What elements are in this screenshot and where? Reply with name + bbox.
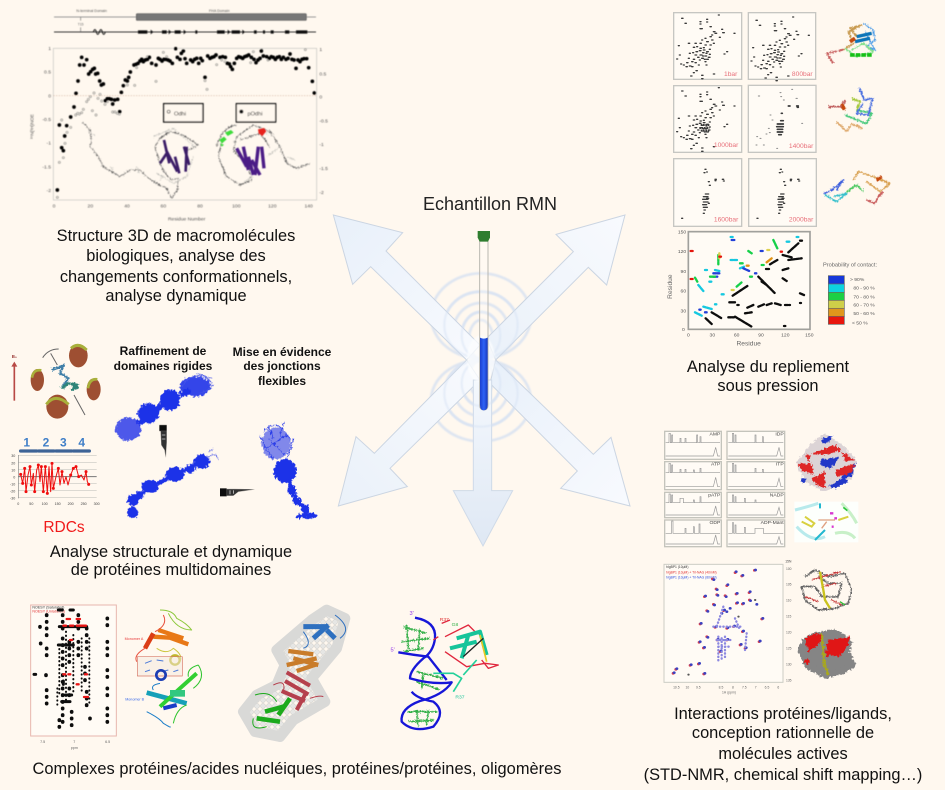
RDC domain labels: 3 [60, 436, 67, 450]
title: Echantillon RMN: Echantillon RMN [423, 194, 557, 214]
HSQC spectrum: 8 [732, 685, 734, 689]
axis labels: 30 [710, 333, 715, 339]
HSQC spectrum: 10 [685, 685, 689, 689]
magnetic field arrow: B₀ [12, 354, 17, 359]
legend: Odhi: Odhi [174, 112, 186, 118]
HSQC spectrum: 1H (ppm) [722, 690, 736, 694]
unfolded structure [823, 172, 890, 203]
red domain [282, 672, 310, 710]
right axis labels: 0.5 [319, 71, 326, 77]
caption: structure 3D: analyse dynamique [105, 287, 247, 305]
filled circles series [57, 49, 314, 190]
probability legend: 50 - 60 % [853, 311, 875, 317]
RDC chart: 10 [11, 468, 15, 472]
legend: pOdhi [236, 104, 276, 122]
HSQC spectrum: 7 [755, 685, 757, 689]
spectrum labels: ADP-Mant [761, 520, 784, 526]
HSQC spectrum: 10.5 [673, 685, 680, 689]
RDC chart: 150 [55, 502, 61, 506]
RDC chart: 30 [11, 454, 15, 458]
NOE chart: ¹⁵N{¹H}NOE [29, 114, 34, 139]
x axis labels: 40 [124, 203, 130, 209]
domain diagram [54, 9, 316, 34]
axis labels: 150 [678, 230, 686, 236]
RDC chart: 300 [94, 502, 100, 506]
domain diagram: N-terminal Domain [76, 9, 107, 13]
ring traces over arrows [444, 292, 518, 427]
caption: interactions: (STD-NMR, chemical shift mapping…) [644, 766, 922, 784]
NOESY spectrum: 6.5 [105, 740, 110, 744]
orange domain [287, 651, 318, 671]
HSQC spectrum: 7.5 [742, 685, 747, 689]
spectrum labels: ITP [776, 462, 784, 468]
spectrum 1600bar: 1600bar [714, 217, 739, 224]
ensemble: flexible [260, 423, 317, 519]
NOE chart: Residue Number [168, 216, 206, 222]
probability legend: < 50 % [852, 320, 868, 326]
RDC chart: -20 [10, 489, 15, 493]
RDC chart: 0 [17, 502, 19, 506]
x axis labels: 60 [161, 203, 166, 209]
spectrum labels: NADP [770, 493, 784, 499]
heading: raffinement: Raffinement de [120, 344, 206, 358]
HSQC spectrum: 15N [785, 559, 792, 563]
x axis labels [53, 203, 313, 209]
HSQC spectrum: hIgBP1 (10μM) + Trl-NAG (40mM) [666, 570, 717, 574]
probability legend [823, 262, 877, 326]
right axis labels: 1 [319, 47, 322, 53]
NOESY spectrum [31, 605, 116, 750]
domain bars [21, 446, 89, 456]
axis labels: 0 [687, 333, 690, 339]
NMR tube [478, 231, 490, 410]
long disordered chain [82, 122, 198, 198]
left axis labels: -2 [47, 188, 51, 194]
arrow: south-east [490, 360, 630, 506]
caption: multidomaines: Analyse structurale et dynamique [50, 543, 292, 561]
spectrum 1000bar [674, 86, 742, 152]
ligand-bound ribbon [802, 570, 852, 610]
green phospho residues [219, 130, 234, 147]
black contacts [706, 241, 804, 327]
RNA-protein complex [391, 611, 498, 729]
axis labels: 90 [758, 333, 764, 339]
HSQC spectrum: 130 [786, 662, 792, 666]
RDC domain labels: 2 [43, 436, 50, 450]
protein: Odhi [160, 140, 189, 173]
right axis labels: -1.5 [319, 166, 328, 172]
axis labels: 0 [682, 327, 685, 333]
central arrows and NMR tube [333, 215, 630, 546]
spectrum labels [708, 431, 784, 526]
NOE chart [29, 46, 328, 222]
contact map [667, 230, 877, 347]
NOESY spectrum: NOESY (Unlabeled) [32, 610, 65, 614]
domain diagram: T15 [78, 22, 84, 26]
spectrum 1bar: 1bar [724, 71, 738, 78]
contact map: Residue [736, 340, 761, 347]
panel: structure 3D [29, 9, 328, 222]
probability legend: 70 - 80 % [853, 294, 875, 300]
NOESY spectrum: ppm [71, 746, 78, 750]
HSQC spectrum: 100 [786, 567, 792, 571]
spectrum 1400bar: 1400bar [789, 143, 814, 150]
intermediate structure [828, 87, 873, 132]
protein: pOdhi [237, 147, 264, 175]
tube glass [480, 240, 488, 410]
RDC chart: 0 [13, 475, 15, 479]
x axis labels: 140 [304, 203, 313, 209]
domain diagram: FHA Domain [209, 9, 230, 13]
bicelles and protein [31, 344, 101, 419]
open circles series [57, 50, 305, 197]
electrostatic surface [797, 435, 856, 488]
HSQC spectrum: 9.5 [696, 685, 701, 689]
spectrum labels: IDP [775, 431, 784, 437]
axis labels: 150 [805, 333, 814, 339]
ribbon: protein monomers [125, 610, 202, 727]
left axis labels: -1 [47, 141, 51, 147]
oligomer SAXS envelope [243, 610, 346, 737]
panel: protéines multidomaines [10, 344, 317, 519]
RNA-protein complex: G8 [452, 622, 459, 628]
caption: interactions: molécules actives [718, 745, 848, 763]
caption: interactions: conception rationnelle de [692, 724, 874, 742]
left axis labels: 1 [48, 46, 51, 52]
spectrum traces [666, 433, 783, 544]
HSQC spectrum: hIgBP1 (10μM) [666, 565, 688, 569]
caption: structure 3D: changements conformationnels, [60, 268, 292, 286]
chain: pOdhi [217, 125, 310, 185]
spectrum 800bar: 800bar [792, 71, 813, 78]
spectrum labels: ATP [711, 462, 721, 468]
HSQC spectrum: hIgBP1 (10μM) + Trl-NAG (80mM) [666, 575, 717, 579]
spectrum 1600bar [674, 159, 742, 226]
arrow: north-west [333, 215, 480, 360]
HSQC spectrum: 8.5 [719, 685, 723, 689]
tube cap [478, 231, 490, 242]
RDC chart: 250 [81, 502, 87, 506]
axis labels: 120 [781, 333, 790, 339]
probability legend: 80 - 90 % [853, 286, 875, 292]
RDC domain labels: 4 [78, 436, 85, 450]
left axis labels: -0.5 [42, 117, 51, 123]
ensemble: rigid top [116, 373, 213, 440]
panel: repliement sous pression [674, 13, 890, 226]
right axis labels: 0 [319, 95, 322, 101]
axis labels: 60 [734, 333, 740, 339]
red residue [258, 128, 266, 136]
left axis labels: 0.5 [44, 70, 51, 76]
left axis labels [42, 46, 51, 194]
legend: pOdhi: pOdhi [247, 112, 263, 118]
STD spectra grid [665, 431, 785, 547]
caption: repliement: sous pression [717, 377, 819, 395]
probability legend: 60 - 70 % [853, 303, 875, 309]
spectrum labels: ODP [710, 520, 721, 526]
heading: jonctions: Mise en évidence [233, 345, 331, 359]
HSQC spectrum: 110 [786, 598, 791, 602]
axis labels: 90 [681, 269, 686, 275]
legend: Odhi [164, 104, 203, 122]
NOESY spectrum: 7 [73, 740, 75, 744]
axis labels: 30 [681, 308, 686, 314]
x axis labels: 20 [88, 203, 93, 209]
RNA-protein complex: 5' [391, 648, 395, 654]
arrow: north-east [487, 215, 625, 360]
colored contacts [691, 237, 798, 316]
RDC chart: 20 [11, 461, 15, 465]
right axis labels: -1 [319, 142, 324, 148]
axis labels: 120 [678, 249, 686, 255]
ligand binding site [794, 502, 858, 542]
panel: complexes [31, 605, 498, 750]
caption: multidomaines: de protéines multidomaines [71, 561, 271, 579]
ensemble: rigid bottom [127, 449, 218, 518]
heading: jonctions: des jonctions [243, 359, 321, 373]
right axis labels: -2 [319, 190, 324, 196]
RDC chart: 100 [42, 502, 48, 506]
heading: jonctions: flexibles [258, 374, 306, 388]
folded structure ribbon [827, 23, 875, 63]
left axis labels: 0 [48, 93, 51, 99]
probability legend: Probability of contact: [823, 262, 877, 268]
HSQC spectrum: 105 [786, 583, 792, 587]
blue domain [303, 625, 335, 638]
x axis labels: 80 [197, 203, 203, 209]
spectrum 800bar [748, 13, 816, 81]
HSQC spectrum: 135 [786, 678, 792, 682]
right axis labels: -0.5 [319, 118, 328, 124]
spectrum 2000bar [749, 159, 816, 226]
spectrum 1000bar: 1000bar [714, 142, 739, 149]
ribbon: protein monomers: Monomer B [125, 697, 145, 701]
spectrum labels: pATP [708, 493, 721, 499]
NOESY spectrum: 7.5 [40, 740, 45, 744]
RDC domain labels: 1 [23, 436, 30, 450]
radio-frequency rings [431, 273, 531, 441]
probability legend: > 90% [850, 277, 865, 283]
caption: complexes: Complexes protéines/acides nucléiques, protéines/protéines, oligomères [32, 760, 562, 778]
ribbon: protein monomers: Monomer A [125, 637, 144, 641]
caption: interactions: Interactions protéines/ligands, [674, 705, 892, 723]
panel: interactions protéines/ligands [664, 431, 858, 694]
right axis labels [319, 47, 328, 196]
spectrum 1400bar [748, 85, 816, 152]
RDC domain labels [23, 436, 85, 450]
RNA-protein complex: R37 [440, 617, 449, 623]
RNA-protein complex: R37 [455, 694, 465, 700]
sample liquid [480, 338, 488, 410]
spectrum 2000bar: 2000bar [789, 217, 814, 224]
HSQC spectrum [664, 559, 792, 694]
contact map: Residue [667, 274, 674, 299]
spectrum 1bar [674, 13, 742, 79]
green domain [257, 698, 290, 722]
axis labels [678, 230, 814, 339]
RDC chart: 200 [68, 502, 74, 506]
RDC chart: -30 [10, 496, 15, 500]
heading: raffinement: domaines rigides [114, 359, 213, 373]
arrow: south-west [338, 360, 480, 506]
RDC chart [10, 454, 100, 506]
HSQC spectrum: 6 [777, 685, 779, 689]
axis labels: 60 [681, 288, 686, 294]
pointer: right [220, 488, 255, 496]
x axis labels: 120 [268, 203, 277, 209]
RDC chart: -10 [10, 482, 15, 486]
left axis labels: -1.5 [42, 164, 51, 170]
caption: repliement: Analyse du repliement [687, 358, 849, 376]
RNA-protein complex: 3' [410, 611, 414, 617]
caption: structure 3D: biologiques, analyse des [86, 247, 266, 265]
HSQC spectrum: 125 [786, 646, 792, 650]
arrow: south [453, 380, 513, 546]
HSQC spectrum: 120 [786, 630, 792, 634]
RDC chart: 50 [29, 502, 33, 506]
label: RDCs: RDCs [43, 519, 85, 536]
caption: structure 3D: Structure 3D de macromolécules [57, 227, 295, 245]
x axis labels: 0 [53, 203, 56, 209]
grey surface with red patches [801, 633, 852, 675]
NOESY spectrum: NOESY (Saturated) [32, 606, 64, 610]
HSQC spectrum: 6.5 [765, 685, 769, 689]
central glow [467, 336, 495, 382]
plot frame [688, 232, 810, 329]
pointer: down [159, 425, 167, 458]
spectrum labels: AMP [710, 431, 721, 437]
HSQC spectrum: 115 [786, 614, 791, 618]
magnetic field arrow [11, 354, 17, 401]
x axis labels: 100 [232, 203, 241, 209]
